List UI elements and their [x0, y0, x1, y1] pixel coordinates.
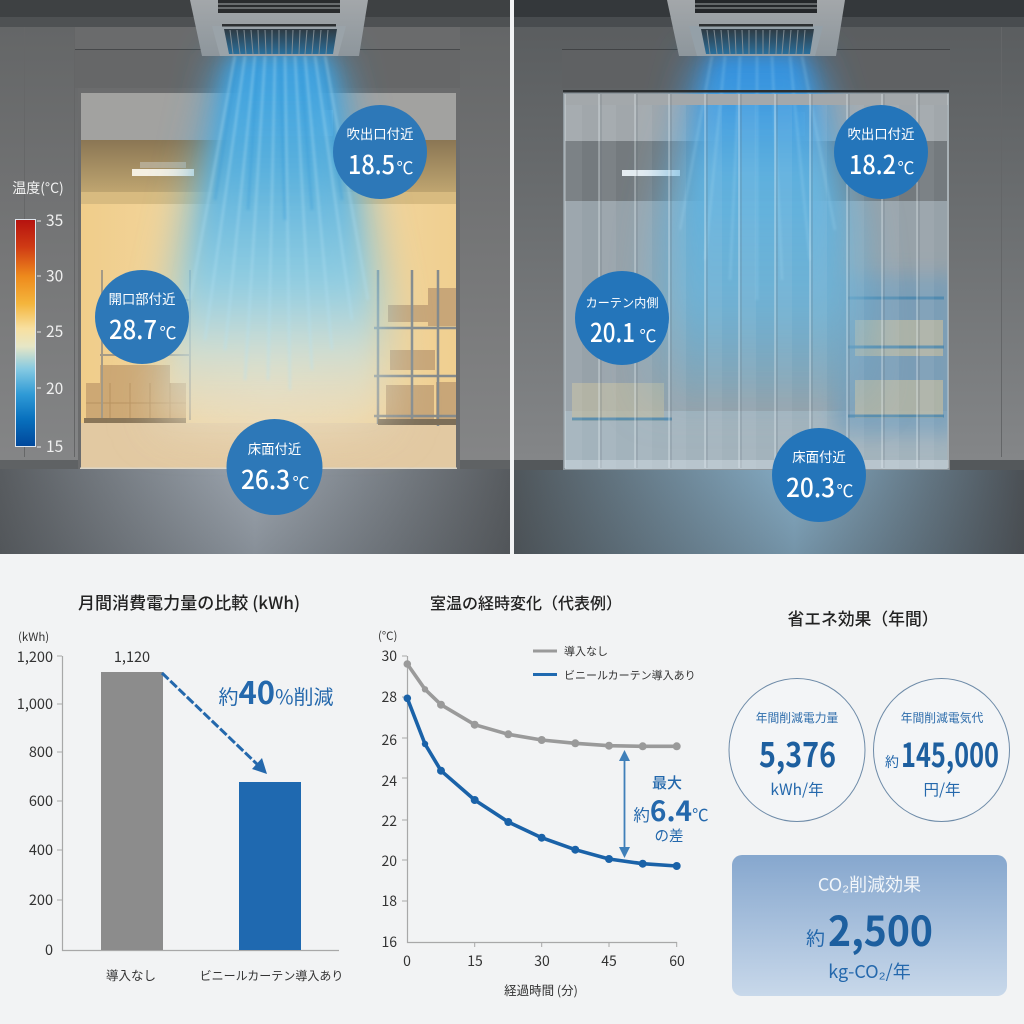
- line chart axes: 30: [381, 646, 397, 666]
- vinyl curtain strips: [563, 90, 949, 469]
- line chart axes: (°C): [378, 628, 397, 644]
- cool room behind curtain: [563, 90, 960, 470]
- temperature legend: 20: [46, 377, 63, 399]
- badge: inside curtain: ℃: [640, 322, 656, 347]
- badge: outlet right: [834, 105, 928, 199]
- stat circle: cost saved: 年間削減電気代: [901, 709, 983, 726]
- bar chart axes: [17, 629, 339, 960]
- warm room through opening: [78, 88, 460, 470]
- stat circle: kWh saved: 年間削減電力量: [756, 709, 838, 726]
- panel: monthly power bar chart: [17, 589, 343, 984]
- bar chart axes: 200: [29, 889, 53, 910]
- line chart axes: 28: [381, 687, 397, 707]
- line chart axes: 30: [534, 951, 550, 971]
- bar: without curtain: [101, 646, 163, 984]
- line chart axes: 経過時間 (分): [504, 980, 578, 999]
- badge: floor left: [226, 419, 322, 515]
- arrow: reduction: [162, 673, 267, 774]
- temperature legend: 35: [46, 209, 63, 231]
- badge: outlet left: 18.5: [348, 145, 395, 182]
- badge: inside curtain: 20.1: [590, 313, 635, 350]
- badge: inside curtain: [575, 271, 669, 365]
- temperature legend: 30: [46, 264, 63, 286]
- panel: with curtain scene: [514, 0, 1024, 554]
- temperature legend: 15: [46, 435, 63, 457]
- stat circle: cost saved: [874, 678, 1010, 822]
- heading: line chart: 室温の経時変化（代表例）: [430, 590, 622, 614]
- floor right: [514, 470, 1024, 554]
- badge: opening left: 開口部付近: [109, 288, 175, 308]
- line chart axes: 16: [381, 932, 397, 952]
- shelves and boxes behind curtain: [572, 298, 944, 421]
- line chart axes: 24: [381, 771, 397, 791]
- shelves and boxes left: [84, 270, 190, 423]
- line chart axes: 18: [381, 891, 397, 911]
- bar chart axes: 1,000: [17, 693, 53, 714]
- badge: floor right: 床面付近: [792, 446, 846, 466]
- temperature legend: 25: [46, 320, 63, 342]
- bar chart axes: 0: [45, 939, 53, 960]
- bar: without curtain: 1,120: [114, 646, 150, 667]
- shelves and boxes right: [374, 270, 456, 426]
- line chart axes: [378, 628, 685, 999]
- bar chart axes: 800: [29, 741, 53, 762]
- temperature legend: 温度(°C): [12, 178, 64, 198]
- legend: line chart: [533, 643, 696, 683]
- line chart axes: 26: [381, 730, 397, 750]
- callout: max temperature difference: の差: [654, 825, 684, 846]
- callout: max temperature difference: 最大: [652, 772, 682, 793]
- badge: outlet right: 18.2: [849, 145, 896, 182]
- badge: opening left: ℃: [160, 319, 176, 344]
- line chart axes: 0: [403, 951, 411, 971]
- panel: without curtain scene: [0, 0, 510, 554]
- air conditioner left: [190, 0, 368, 56]
- bar: without curtain: 導入なし: [106, 965, 156, 984]
- divider between scenes: [510, 0, 514, 554]
- line chart axes: 15: [467, 951, 483, 971]
- temperature legend: [12, 178, 64, 457]
- line chart axes: 22: [381, 811, 397, 831]
- badge: outlet left: 吹出口付近: [347, 123, 413, 143]
- badge: floor left: ℃: [292, 469, 310, 494]
- badge: floor right: 20.3: [786, 468, 835, 505]
- badge: outlet left: [333, 105, 427, 199]
- bar: with curtain: [200, 782, 343, 984]
- stat circle: kWh saved: [729, 678, 865, 822]
- panel: room temperature line chart: [378, 590, 709, 999]
- callout: max temperature difference: [633, 772, 709, 846]
- badge: floor left: 床面付近: [248, 438, 301, 458]
- callout: 40 percent reduction: 約40%削減: [218, 668, 334, 713]
- bar: with curtain: ビニールカーテン導入あり: [200, 967, 343, 984]
- badge: floor right: ℃: [836, 477, 854, 502]
- line chart axes: 45: [601, 951, 617, 971]
- badge: floor right: [772, 428, 866, 522]
- bar chart axes: (kWh): [18, 629, 49, 645]
- badge: floor left: 26.3: [241, 460, 290, 497]
- card: CO2 reduction: [732, 855, 1007, 996]
- badge: opening left: [95, 270, 189, 364]
- heading: savings: 省エネ効果（年間）: [787, 606, 939, 630]
- bar chart axes: 1,200: [17, 646, 53, 667]
- badge: inside curtain: カーテン内側: [585, 293, 659, 311]
- air conditioner right: [667, 0, 845, 56]
- floor left: [0, 468, 510, 554]
- card: CO2 reduction: 約: [806, 924, 825, 951]
- legend: line chart: 導入なし: [564, 643, 608, 659]
- back wall left: [0, 0, 510, 470]
- cold air jet right: [640, 56, 880, 410]
- line chart axes: 60: [669, 951, 685, 971]
- card: CO2 reduction: kg-CO₂/年: [828, 958, 911, 984]
- bar chart axes: 600: [29, 790, 53, 811]
- heading: bar chart: 月間消費電力量の比較 (kWh): [78, 589, 300, 614]
- badge: outlet right: 吹出口付近: [848, 123, 914, 143]
- legend: line chart: ビニールカーテン導入あり: [564, 667, 696, 683]
- panel: annual energy savings: [729, 606, 1010, 996]
- stat circle: cost saved: 約: [885, 752, 899, 772]
- badge: opening left: 28.7: [109, 310, 157, 347]
- back wall right: [514, 0, 1024, 470]
- bar chart axes: 400: [29, 839, 53, 860]
- callout: max temperature difference: 約6.4℃: [633, 790, 709, 830]
- cold air jet left: [140, 56, 405, 445]
- line: without curtain: [404, 660, 681, 750]
- badge: outlet right: ℃: [898, 154, 914, 179]
- stat circle: kWh saved: 5,376: [759, 728, 836, 777]
- arrow: temperature gap: [619, 750, 630, 858]
- card: CO2 reduction: CO₂削減効果: [818, 871, 921, 897]
- stat circle: kWh saved: kWh/年: [770, 778, 824, 800]
- card: CO2 reduction: 2,500: [828, 898, 933, 958]
- stat circle: cost saved: 円/年: [923, 778, 961, 800]
- line: with curtain: [404, 694, 681, 870]
- badge: outlet left: ℃: [396, 154, 414, 179]
- line chart axes: 20: [381, 851, 397, 871]
